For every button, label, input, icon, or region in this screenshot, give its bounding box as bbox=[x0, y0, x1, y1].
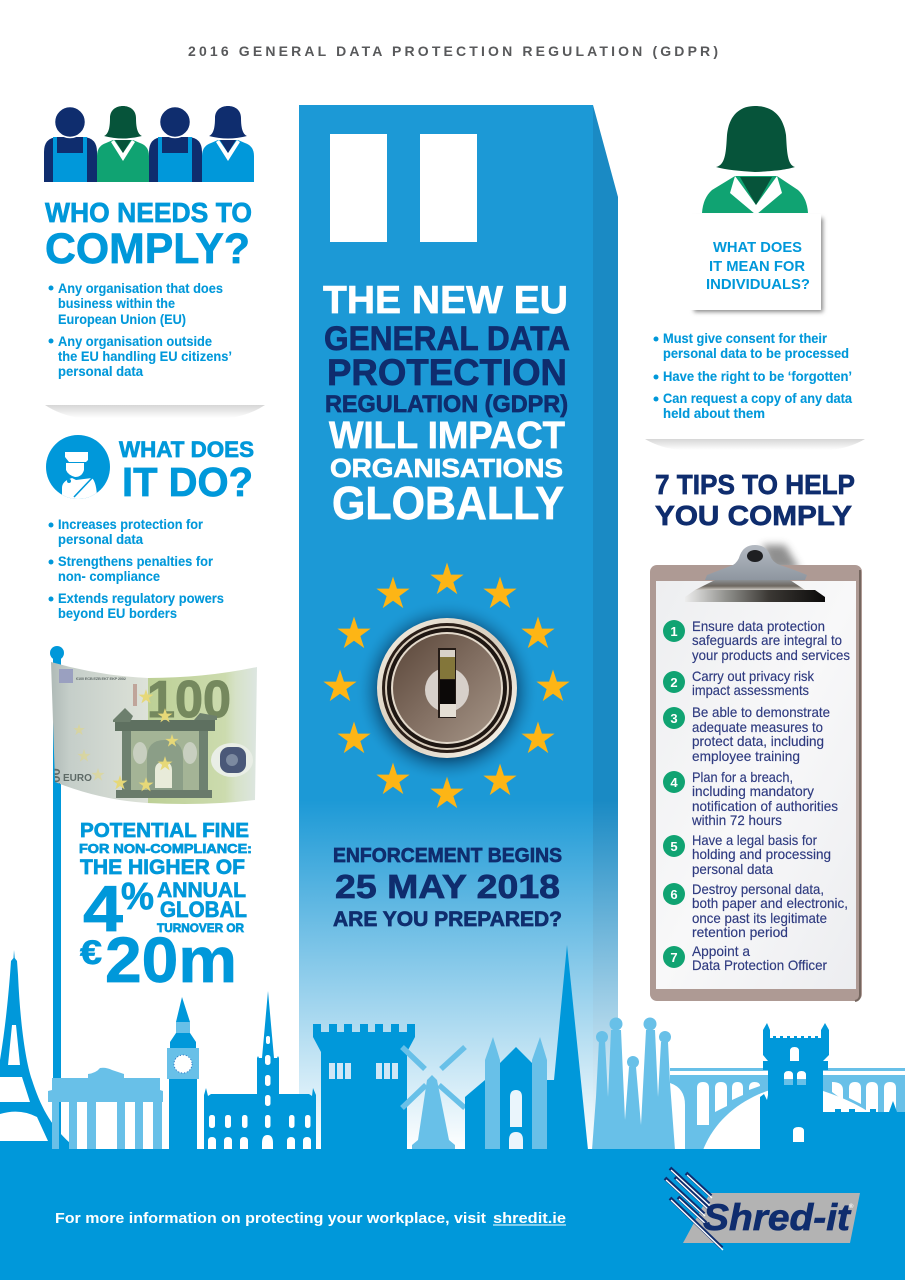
fine text: ANNUAL bbox=[157, 879, 246, 902]
icon: four people bbox=[44, 106, 254, 182]
heading: 7 tips: 7 TIPS TO HELP bbox=[655, 469, 855, 500]
heading: 7 tips: YOU COMPLY bbox=[655, 500, 852, 531]
tip text: both paper and electronic, bbox=[692, 895, 848, 911]
headline: PROTECTION bbox=[327, 352, 567, 393]
fine text: GLOBAL bbox=[160, 897, 247, 922]
title: 2016 GENERAL DATA PROTECTION REGULATION (GDPR) bbox=[188, 43, 718, 59]
fine text: % bbox=[121, 876, 154, 918]
bullets: individuals: held about them bbox=[663, 406, 765, 421]
tower windows bbox=[330, 134, 477, 242]
bullets: what does it do: non- compliance bbox=[58, 569, 160, 584]
tip text: Carry out privacy risk bbox=[692, 668, 815, 684]
card: what does it mean for individuals bbox=[685, 214, 823, 312]
banknote flag bbox=[48, 660, 258, 808]
tip text: Appoint a bbox=[692, 943, 750, 959]
bullets: what does it do: Extends regulatory powers bbox=[58, 591, 224, 606]
card: what does it mean for individuals: IT MEAN FOR bbox=[709, 258, 805, 275]
tip numbers bbox=[663, 620, 685, 968]
heading: what does it do bbox=[119, 437, 254, 505]
headline bbox=[323, 279, 570, 529]
skyline bbox=[0, 945, 905, 1150]
bullets: who needs to comply: personal data bbox=[58, 364, 143, 379]
bullets: individuals bbox=[654, 331, 852, 421]
icon: officer badge bbox=[46, 435, 110, 500]
bullets: who needs to comply: business within the bbox=[58, 296, 175, 311]
tip text: holding and processing bbox=[692, 846, 831, 862]
bullets: who needs to comply bbox=[48, 281, 232, 379]
tip numbers: 7 bbox=[670, 950, 678, 965]
headline: REGULATION (GDPR) bbox=[325, 391, 568, 418]
tip text: once past its legitimate bbox=[692, 910, 827, 926]
bullets: what does it do: beyond EU borders bbox=[58, 606, 177, 621]
headline: THE NEW EU bbox=[323, 279, 568, 322]
tip text: Plan for a breach, bbox=[692, 769, 793, 785]
person 3 bbox=[149, 106, 202, 182]
banknote flag: 100 bbox=[48, 768, 63, 790]
tip numbers: 5 bbox=[670, 839, 678, 854]
tip text: Have a legal basis for bbox=[692, 832, 817, 848]
cathedral bbox=[465, 945, 588, 1150]
person 1 bbox=[44, 106, 97, 182]
Brandenburg gate bbox=[48, 1068, 163, 1149]
bullets: individuals: Have the right to be ‘forgotten’ bbox=[663, 369, 852, 384]
footer text: For more information on protecting your workplace, visit bbox=[55, 1210, 486, 1227]
tip text: Data Protection Officer bbox=[692, 957, 827, 973]
tip text: personal data bbox=[692, 861, 773, 877]
tower balls bbox=[596, 1018, 671, 1068]
heading: who needs to comply: COMPLY? bbox=[45, 225, 250, 273]
tip text bbox=[691, 618, 850, 973]
fortress tower bbox=[760, 1023, 905, 1150]
flag pole bbox=[50, 646, 64, 1150]
clipboard bbox=[650, 545, 862, 1001]
tip numbers: 6 bbox=[670, 887, 678, 902]
icon: lock bbox=[355, 599, 539, 783]
enforcement text: ENFORCEMENT BEGINS bbox=[333, 845, 562, 867]
headline: GENERAL DATA bbox=[324, 320, 570, 358]
bullets: individuals: Must give consent for their bbox=[663, 331, 828, 346]
icon: EU stars ring bbox=[323, 562, 570, 808]
bullets: who needs to comply: the EU handling EU citizens’ bbox=[58, 349, 232, 364]
tip numbers: 3 bbox=[670, 711, 678, 726]
person 4 bbox=[202, 106, 254, 182]
heading: who needs to comply: WHO NEEDS TO bbox=[45, 197, 252, 228]
bridge bbox=[670, 1068, 905, 1150]
fine text: € bbox=[80, 934, 102, 972]
heading: who needs to comply bbox=[45, 197, 252, 273]
banknote flag: €100 ECB EZB EKT EKP 2002 bbox=[76, 676, 127, 681]
tip text: Destroy personal data, bbox=[692, 881, 824, 897]
tip text: adequate measures to bbox=[692, 719, 823, 735]
headline: ORGANISATIONS bbox=[330, 453, 563, 483]
castle tower bbox=[313, 1024, 415, 1150]
bullets: who needs to comply: Any organisation outside bbox=[58, 334, 212, 349]
fine text: 4 bbox=[83, 872, 123, 945]
icon: large woman bbox=[702, 106, 808, 214]
panel: central tower bbox=[299, 105, 618, 1150]
headline: WILL IMPACT bbox=[329, 415, 565, 457]
fine text: POTENTIAL FINE bbox=[80, 820, 249, 842]
windmill bbox=[402, 1047, 465, 1150]
Eiffel tower bbox=[0, 950, 70, 1150]
tip text: your products and services bbox=[692, 647, 850, 663]
headline: GLOBALLY bbox=[332, 477, 564, 529]
tip text: Ensure data protection bbox=[692, 618, 825, 634]
tip text: retention period bbox=[692, 924, 788, 940]
tip text: safeguards are integral to bbox=[692, 632, 842, 648]
bullets: who needs to comply: Any organisation that does bbox=[58, 281, 223, 296]
logo: Shred-it: Shred-it bbox=[703, 1197, 852, 1238]
logo: Shred-it bbox=[665, 1168, 860, 1250]
person 2 bbox=[97, 106, 149, 182]
tip text: Be able to demonstrate bbox=[692, 704, 830, 720]
tip text: including mandatory bbox=[692, 783, 814, 799]
bullets: what does it do: Increases protection for bbox=[58, 517, 204, 532]
Big Ben bbox=[167, 997, 199, 1150]
tip text: impact assessments bbox=[692, 682, 809, 698]
fine text: TURNOVER OR bbox=[157, 921, 244, 935]
footer band bbox=[0, 1149, 905, 1280]
shadow divider left bbox=[45, 405, 265, 418]
tip numbers: 4 bbox=[670, 775, 678, 790]
tip text: employee training bbox=[692, 748, 800, 764]
banknote flag: EURO bbox=[63, 773, 92, 784]
bullets: what does it do: personal data bbox=[58, 532, 143, 547]
heading: what does it do: IT DO? bbox=[122, 459, 253, 505]
card: what does it mean for individuals: WHAT DOES bbox=[713, 239, 802, 256]
heading: what does it do: WHAT DOES bbox=[119, 437, 254, 462]
fine text bbox=[79, 820, 252, 996]
fine text: FOR NON-COMPLIANCE: bbox=[79, 841, 252, 856]
tip text: notification of authorities bbox=[692, 798, 838, 814]
Gothic hall bbox=[204, 991, 316, 1150]
enforcement text bbox=[333, 845, 562, 931]
card: what does it mean for individuals: INDIVIDUALS? bbox=[706, 276, 810, 293]
fine text: 20m bbox=[105, 924, 237, 996]
metal clip bbox=[685, 545, 825, 602]
fine text: THE HIGHER OF bbox=[80, 856, 245, 879]
tip numbers: 2 bbox=[670, 675, 678, 690]
tip numbers: 1 bbox=[670, 624, 678, 639]
banknote flag: 100 bbox=[147, 671, 231, 729]
enforcement text: ARE YOU PREPARED? bbox=[333, 908, 562, 931]
enforcement text: 25 MAY 2018 bbox=[335, 868, 560, 905]
logo: Shred-it: ® bbox=[849, 1203, 854, 1210]
bullets: what does it do: Strengthens penalties for bbox=[58, 554, 214, 569]
shadow divider right bbox=[645, 439, 865, 450]
heading: 7 tips bbox=[655, 469, 855, 531]
bullets: who needs to comply: European Union (EU) bbox=[58, 312, 186, 327]
tip text: protect data, including bbox=[692, 733, 824, 749]
bullets: individuals: personal data to be processed bbox=[663, 346, 849, 361]
tip text: within 72 hours bbox=[691, 812, 782, 828]
bullets: individuals: Can request a copy of any data bbox=[663, 391, 852, 406]
Sagrada towers bbox=[592, 1030, 675, 1150]
bullets: what does it do bbox=[48, 517, 224, 621]
footer text: shredit.ie bbox=[493, 1210, 566, 1227]
